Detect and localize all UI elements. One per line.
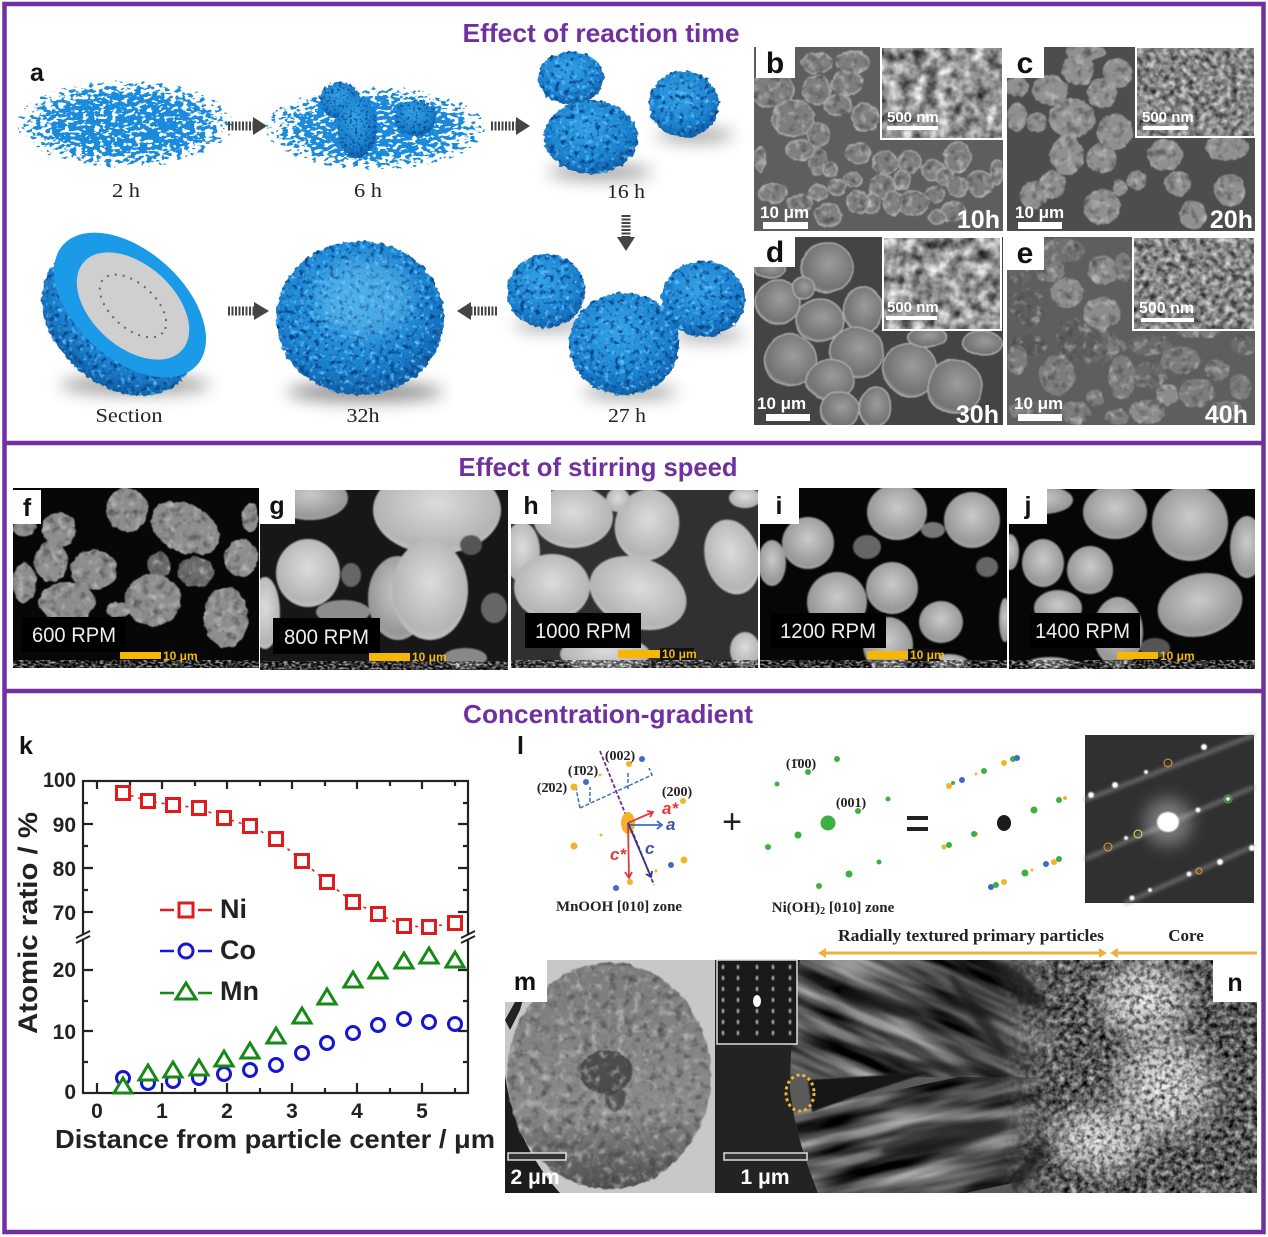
scale bar: 10 μm bbox=[1160, 649, 1195, 663]
series: Mn bbox=[114, 948, 464, 1093]
scale bar bbox=[867, 648, 945, 662]
MnOOH pattern: MnOOH [010] zone bbox=[556, 899, 682, 915]
magnification box: 1000 RPM bbox=[535, 620, 631, 643]
panel: concentration gradient bbox=[13, 699, 1257, 1229]
series: Co bbox=[116, 1012, 462, 1090]
label box b: b bbox=[766, 47, 784, 80]
annotation: core bbox=[1110, 926, 1257, 958]
arrow bbox=[228, 302, 269, 320]
label box f bbox=[13, 490, 41, 524]
heading: concentration-gradient: Concentration-gradient bbox=[463, 699, 753, 729]
illustration: section bbox=[13, 205, 233, 426]
info bar bbox=[511, 660, 758, 668]
SAED image bbox=[1085, 735, 1255, 903]
scale bar bbox=[508, 1153, 566, 1189]
x tick labels: 0 bbox=[91, 1100, 103, 1123]
illustration: 32 h sphere bbox=[276, 241, 444, 402]
inset scale bar: 500 nm bbox=[887, 299, 939, 316]
label box i: i bbox=[776, 492, 782, 520]
label box c bbox=[1007, 47, 1044, 80]
scale bar: 10 μm bbox=[1014, 394, 1063, 413]
heading: effect of stirring speed: Effect of stirring speed bbox=[458, 452, 738, 482]
label a: a bbox=[30, 59, 45, 87]
label box h bbox=[511, 490, 551, 524]
combined pattern bbox=[942, 755, 1067, 890]
scale bar: 10 μm bbox=[760, 203, 809, 222]
x tick labels: 5 bbox=[416, 1100, 428, 1123]
time label: 30h bbox=[956, 401, 999, 429]
inset scale bar: 500 nm bbox=[1139, 300, 1194, 317]
y tick labels: 20 bbox=[53, 959, 76, 982]
panel j: 1400 RPM bbox=[1001, 485, 1264, 669]
Ni(OH)2 pattern: 2 bbox=[820, 906, 825, 917]
label box i bbox=[760, 488, 799, 524]
SAED inset bbox=[717, 960, 797, 1044]
scale bar bbox=[618, 647, 697, 661]
magnification box: 1400 RPM bbox=[1035, 620, 1130, 643]
panel b: SEM 10h bbox=[750, 47, 1003, 234]
label box e: e bbox=[1017, 237, 1033, 270]
Ni(OH)2 pattern: Ni(OH) bbox=[772, 900, 820, 916]
scale bar: 10 μm bbox=[412, 650, 447, 664]
legend bbox=[160, 894, 259, 1006]
legend: Ni bbox=[220, 894, 247, 924]
scale bar bbox=[120, 649, 198, 663]
series: Ni bbox=[116, 786, 462, 934]
label box n bbox=[1213, 960, 1257, 1002]
magnification box bbox=[1030, 613, 1140, 648]
inset scale bar: 500 nm bbox=[1142, 109, 1194, 126]
label box h: h bbox=[523, 492, 539, 520]
caption: 32h bbox=[346, 405, 380, 427]
arrow bbox=[491, 117, 530, 135]
MnOOH pattern: (2̄02) bbox=[537, 781, 567, 796]
y axis title: Atomic ratio / % bbox=[13, 812, 43, 1034]
annotation: core: Core bbox=[1168, 926, 1204, 945]
MnOOH pattern: a* bbox=[662, 799, 679, 818]
info bar bbox=[760, 660, 1007, 668]
scale bar: 10 μm bbox=[662, 647, 697, 661]
label box f: f bbox=[23, 494, 32, 522]
label box g bbox=[260, 490, 295, 524]
caption: 16 h bbox=[607, 181, 645, 203]
x tick labels: 3 bbox=[286, 1100, 298, 1123]
magnification box bbox=[273, 618, 380, 654]
MnOOH pattern: c* bbox=[610, 845, 627, 864]
heading: effect of reaction time: Effect of reaction time bbox=[462, 18, 740, 48]
x tick labels bbox=[91, 1100, 428, 1123]
x tick labels: 2 bbox=[221, 1100, 233, 1123]
magnification box: 600 RPM bbox=[32, 624, 116, 647]
magnification box: 1200 RPM bbox=[780, 620, 876, 643]
panel l: diffraction schematic bbox=[517, 732, 1255, 917]
panel m: TEM cross-section bbox=[505, 960, 715, 1193]
scale bar: 2 μm bbox=[510, 1166, 560, 1189]
scale bar: 10 μm bbox=[1015, 203, 1064, 222]
yellow dashed circle bbox=[786, 1075, 814, 1111]
y tick labels bbox=[43, 769, 76, 1104]
label box m: m bbox=[514, 968, 536, 996]
panel e: SEM 40h bbox=[1007, 237, 1259, 429]
illustration: 27 h spheres bbox=[507, 254, 745, 399]
magnification box bbox=[525, 613, 641, 648]
x tick labels: 4 bbox=[351, 1100, 363, 1123]
panel g: 800 RPM bbox=[260, 490, 508, 670]
label box m bbox=[505, 960, 547, 1002]
scale bar bbox=[724, 1153, 807, 1189]
arrow bbox=[457, 302, 497, 320]
annotation: radially textured primary particles: Radially textured primary particles bbox=[838, 926, 1104, 945]
scale bar bbox=[1117, 649, 1195, 663]
arrow bbox=[617, 215, 635, 251]
y tick labels: 70 bbox=[53, 902, 76, 925]
y tick labels: 10 bbox=[53, 1021, 76, 1044]
Ni(OH)2 pattern: (001) bbox=[836, 796, 866, 811]
label box d bbox=[754, 236, 795, 269]
label box e bbox=[1007, 237, 1044, 270]
caption: Section bbox=[96, 405, 162, 427]
legend: Mn bbox=[220, 976, 259, 1006]
label k: k bbox=[19, 732, 33, 760]
inset scale bar: 500 nm bbox=[887, 109, 939, 126]
MnOOH pattern: (200) bbox=[662, 785, 692, 800]
label box j bbox=[1009, 489, 1047, 524]
label box c: c bbox=[1017, 47, 1033, 80]
x tick labels: 1 bbox=[156, 1100, 168, 1123]
MnOOH pattern: (1̄02) bbox=[568, 764, 598, 779]
MnOOH pattern: c bbox=[645, 839, 655, 858]
Ni(OH)2 pattern: (1̄00) bbox=[786, 757, 816, 772]
chart k: atomic ratio vs distance bbox=[13, 769, 495, 1154]
legend: Co bbox=[220, 935, 256, 965]
inset image bbox=[881, 47, 1003, 139]
inset image bbox=[1136, 47, 1255, 137]
scale bar: 1 μm bbox=[740, 1166, 790, 1189]
label box d: d bbox=[766, 236, 784, 269]
panel f: 600 RPM bbox=[12, 488, 259, 668]
panel i: 1200 RPM bbox=[758, 484, 1011, 673]
inset image bbox=[883, 237, 1001, 330]
panel d: SEM 30h bbox=[754, 236, 1003, 429]
x axis title: Distance from particle center / μm bbox=[55, 1124, 495, 1154]
illustration: 2 h flakes bbox=[17, 80, 233, 168]
y tick labels: 80 bbox=[53, 858, 76, 881]
y tick labels: 90 bbox=[53, 814, 76, 837]
scale bar bbox=[369, 650, 447, 664]
caption: 2 h bbox=[112, 180, 140, 202]
panel: effect of stirring speed bbox=[12, 452, 1264, 673]
time label: 20h bbox=[1210, 206, 1253, 234]
magnification box: 800 RPM bbox=[284, 626, 369, 649]
illustration: 6 h flakes and clusters bbox=[265, 82, 485, 170]
caption: 6 h bbox=[354, 180, 382, 202]
annotation: radially textured primary particles bbox=[818, 926, 1107, 958]
MnOOH pattern: (002) bbox=[605, 749, 635, 764]
equals sign bbox=[907, 816, 928, 831]
Ni(OH)2 pattern bbox=[765, 756, 895, 917]
panel h: 1000 RPM bbox=[511, 490, 758, 668]
time label: 10h bbox=[957, 206, 1000, 234]
scale bar: 10 μm bbox=[910, 648, 945, 662]
panel c: SEM 20h bbox=[1005, 44, 1255, 234]
dark streak bbox=[808, 1072, 930, 1112]
scale bar: 10 μm bbox=[757, 394, 806, 413]
label box j: j bbox=[1024, 492, 1031, 520]
plus sign: + bbox=[722, 803, 742, 841]
label l: l bbox=[517, 732, 524, 760]
axis break marks bbox=[76, 931, 475, 943]
magnification box bbox=[22, 617, 126, 652]
label box n: n bbox=[1227, 969, 1243, 997]
info bar bbox=[1009, 660, 1255, 669]
panel a: growth schematic bbox=[13, 52, 745, 427]
plot frame and ticks bbox=[83, 781, 468, 1093]
info bar bbox=[260, 661, 508, 670]
MnOOH pattern bbox=[537, 749, 692, 915]
magnification box bbox=[770, 613, 886, 648]
label box g: g bbox=[269, 492, 285, 520]
scale bar: 10 μm bbox=[163, 649, 198, 663]
y tick labels: 0 bbox=[64, 1081, 76, 1104]
illustration: 16 h spheres bbox=[538, 52, 733, 180]
scale bar bbox=[757, 394, 810, 421]
caption: 27 h bbox=[608, 405, 646, 427]
Ni(OH)2 pattern: [010] zone bbox=[825, 900, 895, 916]
panel: effect of reaction time bbox=[13, 18, 1259, 429]
arrow bbox=[228, 117, 267, 135]
y tick labels: 100 bbox=[43, 769, 76, 792]
inset image bbox=[1133, 237, 1255, 330]
time label: 40h bbox=[1205, 401, 1248, 429]
MnOOH pattern: a bbox=[666, 815, 675, 834]
panel n: TEM magnified bbox=[715, 959, 1257, 1193]
label box b bbox=[756, 47, 795, 80]
info bar bbox=[13, 660, 259, 668]
